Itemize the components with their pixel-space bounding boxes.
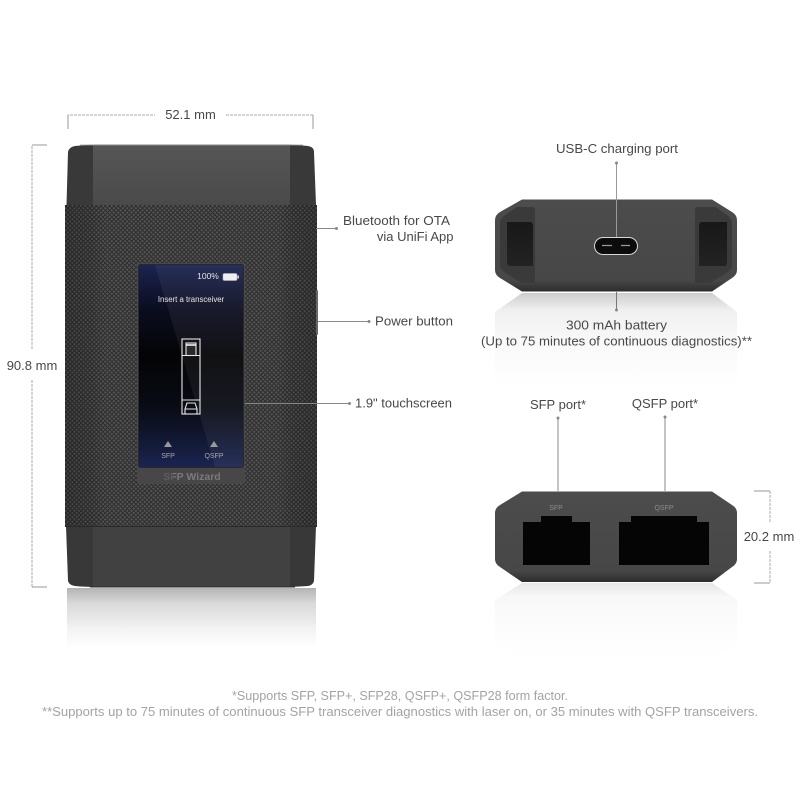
footnotes xyxy=(42,688,758,719)
callout: power button xyxy=(318,314,453,328)
reflection under port view xyxy=(495,583,737,660)
dimension: width 52.1 mm xyxy=(68,107,313,129)
right recess xyxy=(695,207,732,283)
touchscreen xyxy=(138,264,244,468)
instruction text: Insert a transceiver xyxy=(158,295,225,304)
transceiver icon xyxy=(182,339,200,414)
knurled body xyxy=(65,205,317,527)
left recess xyxy=(500,207,535,283)
screen bezel with brand: SFP Wizard xyxy=(163,471,221,483)
screen bezel with brand xyxy=(137,263,245,484)
callout: Bluetooth: via UniFi App xyxy=(377,229,454,244)
device: transceiver port end view xyxy=(495,492,737,582)
SFP selector xyxy=(161,441,175,460)
QSFP port opening xyxy=(619,505,709,565)
dimension: height 90.8 mm: 90.8 mm xyxy=(7,358,57,373)
QSFP selector: QSFP xyxy=(204,453,224,460)
dimension: depth 20.2 mm xyxy=(744,491,794,583)
QSFP port opening: QSFP xyxy=(654,505,674,512)
status battery: 100% xyxy=(197,271,219,281)
callout: SFP port: SFP port* xyxy=(530,397,586,412)
footnotes: **Supports up to 75 minutes of continuous SFP transceiver diagnostics with laser on, or 35 minutes with QSFP transceivers. xyxy=(42,704,758,719)
callout: QSFP port xyxy=(632,396,698,491)
SFP port opening xyxy=(523,505,590,565)
top cap xyxy=(66,144,316,205)
callout: touchscreen: 1.9" touchscreen xyxy=(355,396,452,410)
callout: power button: Power button xyxy=(375,314,453,328)
USB-C port xyxy=(594,238,638,254)
callout: touchscreen xyxy=(245,396,452,410)
dimension: width 52.1 mm: 52.1 mm xyxy=(165,107,216,122)
status battery xyxy=(197,271,239,281)
dimension: height 90.8 mm xyxy=(7,145,57,587)
power button xyxy=(316,290,318,335)
dimension: depth 20.2 mm: 20.2 mm xyxy=(744,529,794,544)
callout: Bluetooth: Bluetooth for OTA xyxy=(343,213,450,228)
callout: QSFP port: QSFP port* xyxy=(632,396,698,411)
SFP port opening: SFP xyxy=(549,505,563,512)
device: USB-C end view xyxy=(495,200,737,292)
SFP selector: SFP xyxy=(161,453,175,460)
callout: SFP port xyxy=(530,397,586,491)
QSFP selector xyxy=(204,441,224,460)
callout: battery xyxy=(481,292,752,348)
callout: battery: (Up to 75 minutes of continuous diagnostics)** xyxy=(481,334,752,348)
bottom cap xyxy=(66,526,316,587)
reflection under main device xyxy=(67,588,316,648)
callout: battery: 300 mAh battery xyxy=(566,318,668,332)
callout: USB-C charging port: USB-C charging port xyxy=(556,141,678,156)
callout: Bluetooth xyxy=(316,213,454,244)
callout: USB-C charging port xyxy=(556,141,678,237)
device: front view xyxy=(65,144,318,587)
reflection under USB-C view xyxy=(495,293,737,388)
footnotes: *Supports SFP, SFP+, SFP28, QSFP+, QSFP28 form factor. xyxy=(232,688,568,703)
